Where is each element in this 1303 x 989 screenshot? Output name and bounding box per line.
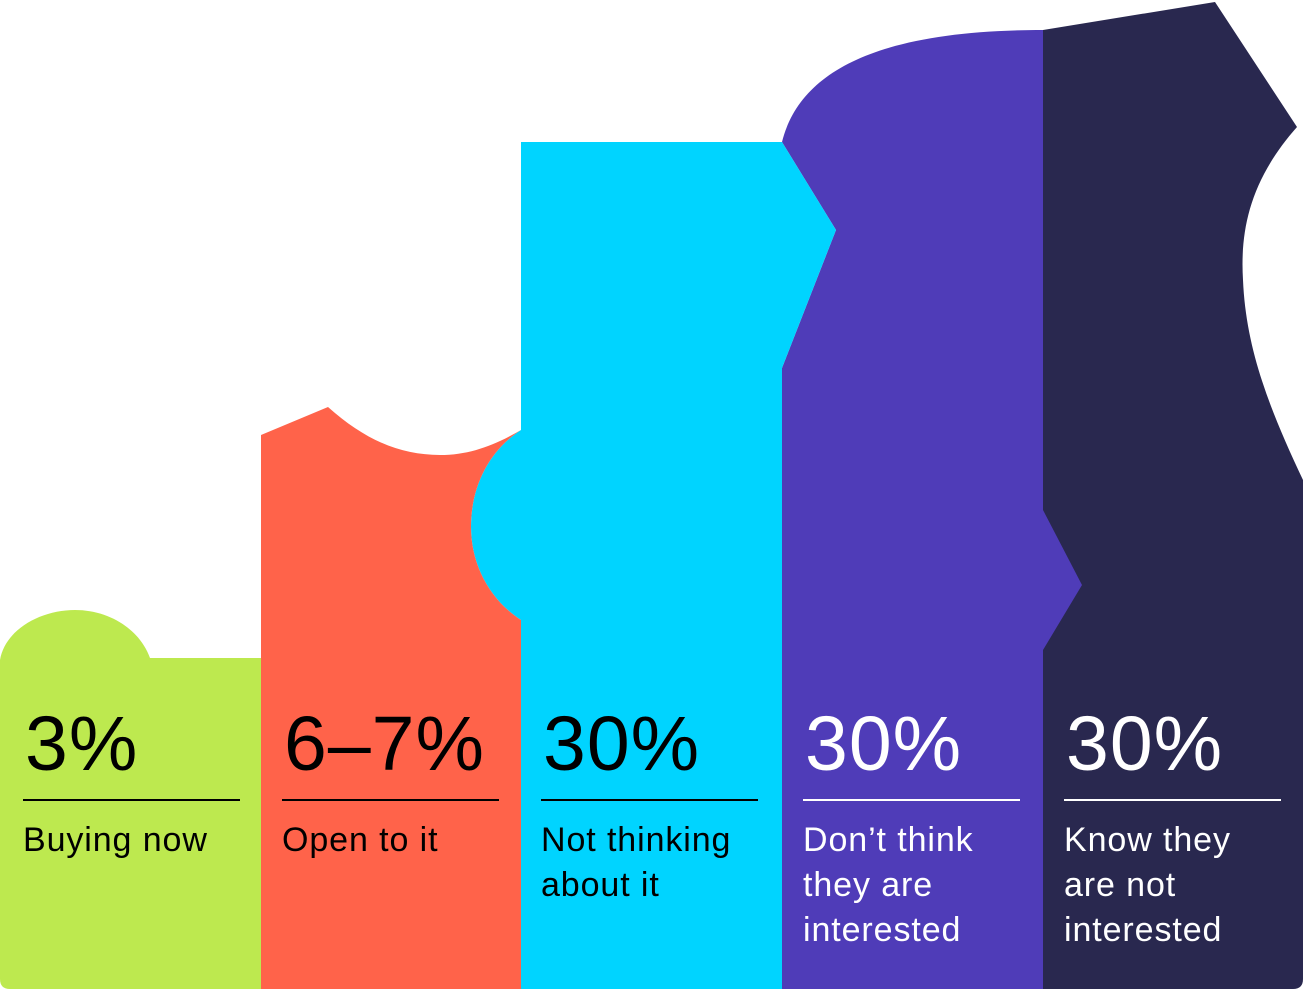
- stat: know not interested: interested: [1064, 911, 1222, 949]
- stat: buying now: Buying now: [23, 821, 208, 859]
- stat: not thinking: [541, 701, 758, 904]
- panel: orange column: [261, 407, 521, 989]
- stat: know not interested: are not: [1064, 866, 1176, 904]
- stat: not thinking: Not thinking: [541, 821, 731, 859]
- panel: purple column: [782, 30, 1082, 989]
- stat: open to it: Open to it: [282, 821, 438, 859]
- stat: open to it: [282, 701, 499, 859]
- stat: don't think interested: [803, 701, 1020, 949]
- stat: not thinking: 30%: [543, 701, 700, 787]
- stat: buying now: 3%: [25, 701, 138, 787]
- panel: green column: [0, 610, 261, 989]
- panel: cyan column: [471, 142, 836, 989]
- stat: open to it: 6–7%: [284, 701, 485, 787]
- stat: buying now: [23, 701, 240, 859]
- stat: know not interested: 30%: [1066, 701, 1223, 787]
- stat: know not interested: Know they: [1064, 821, 1231, 859]
- stat: know not interested: [1064, 701, 1281, 949]
- panel: navy column: [1043, 2, 1303, 989]
- stat: not thinking: about it: [541, 866, 660, 904]
- stat: don't think interested: interested: [803, 911, 961, 949]
- stat: don't think interested: they are: [803, 866, 933, 904]
- stat: don't think interested: Don’t think: [803, 821, 974, 859]
- stat: don't think interested: 30%: [805, 701, 962, 787]
